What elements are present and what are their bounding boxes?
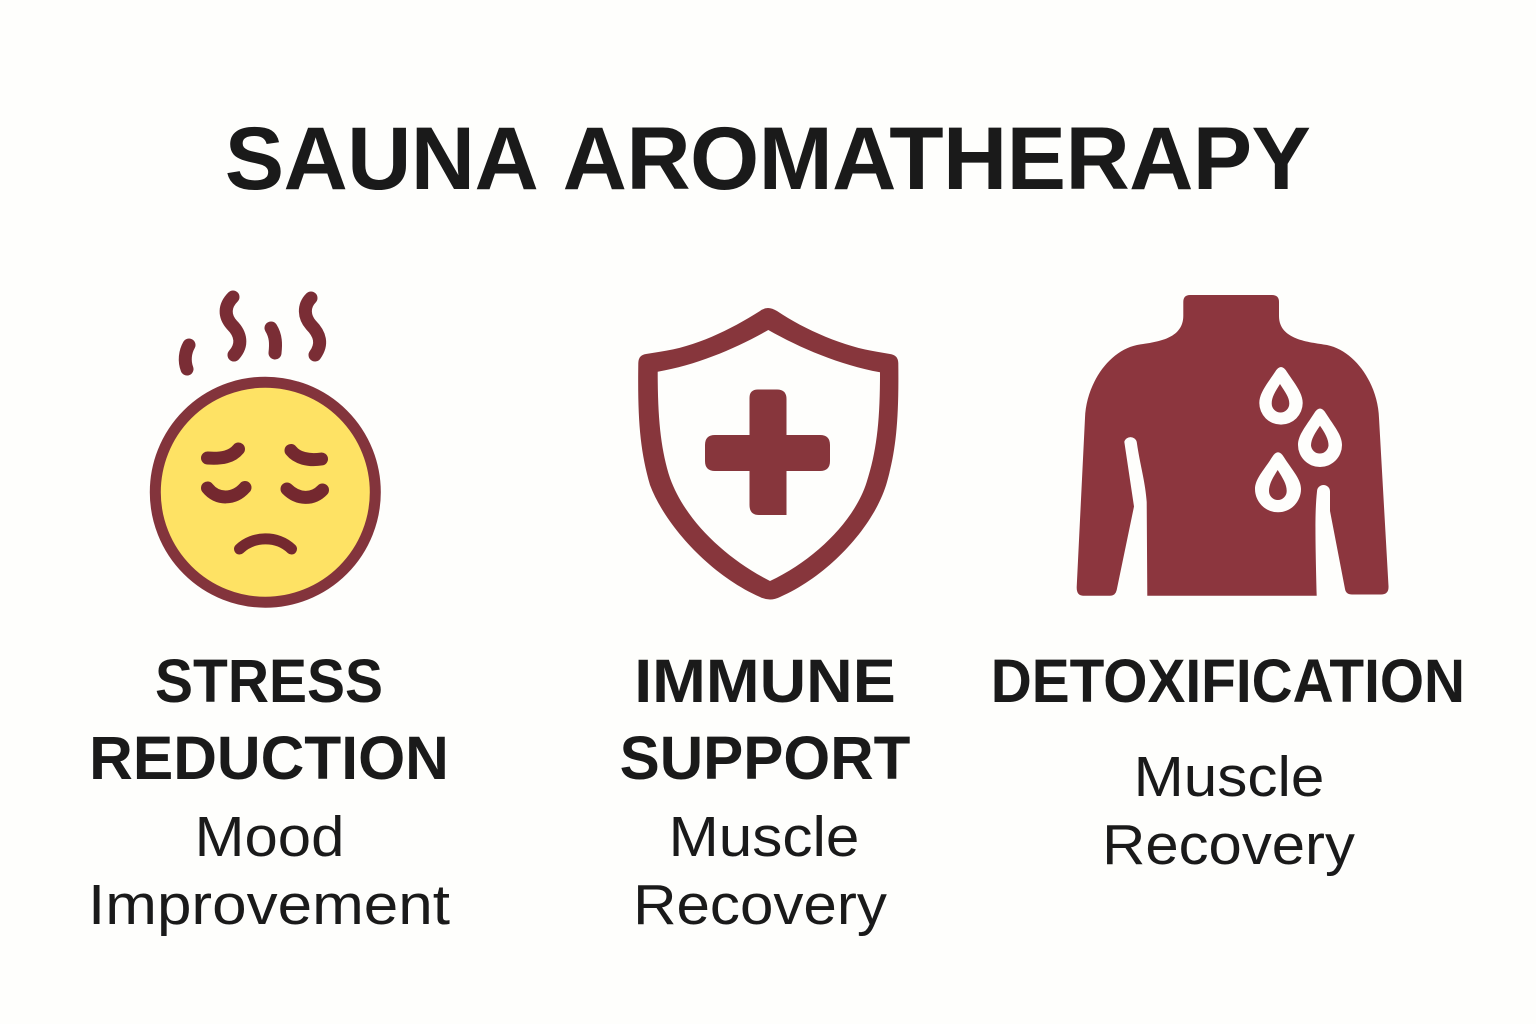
icon: shield with medical cross [638,308,898,600]
shield outline [638,308,898,600]
heading: stress reduction [89,647,449,792]
text: muscle recovery (immune) [633,805,887,937]
text: muscle recovery (detox): Recovery [1102,813,1355,877]
closed eyes, brows and frown [208,449,322,549]
steam wisps [185,297,320,369]
heading: immune support [620,647,910,792]
torso silhouette [1077,295,1389,596]
icon: stressed face with steam [150,290,381,608]
text: muscle recovery (immune): Recovery [633,873,887,937]
title: SAUNA AROMATHERAPY [225,108,1310,208]
heading: stress reduction: STRESS [155,647,383,715]
face circle [155,382,375,602]
text: muscle recovery (detox): Muscle [1134,745,1324,809]
medical cross [705,390,830,515]
heading: detoxification: DETOXIFICATION [991,647,1465,715]
heading: immune support: IMMUNE [634,647,896,715]
sweat drop 2 [1298,408,1342,467]
heading: stress reduction: REDUCTION [89,724,449,792]
text: mood improvement: Improvement [88,873,450,937]
text: mood improvement: Mood [195,805,344,869]
heading: immune support: SUPPORT [620,724,910,792]
text: mood improvement [88,805,450,937]
sweat drop 3 [1255,452,1301,512]
sweat drop 1 [1259,367,1303,425]
text: muscle recovery (detox) [1102,745,1355,877]
icon: torso with sweat drops [1076,295,1388,596]
text: muscle recovery (immune): Muscle [669,805,859,869]
